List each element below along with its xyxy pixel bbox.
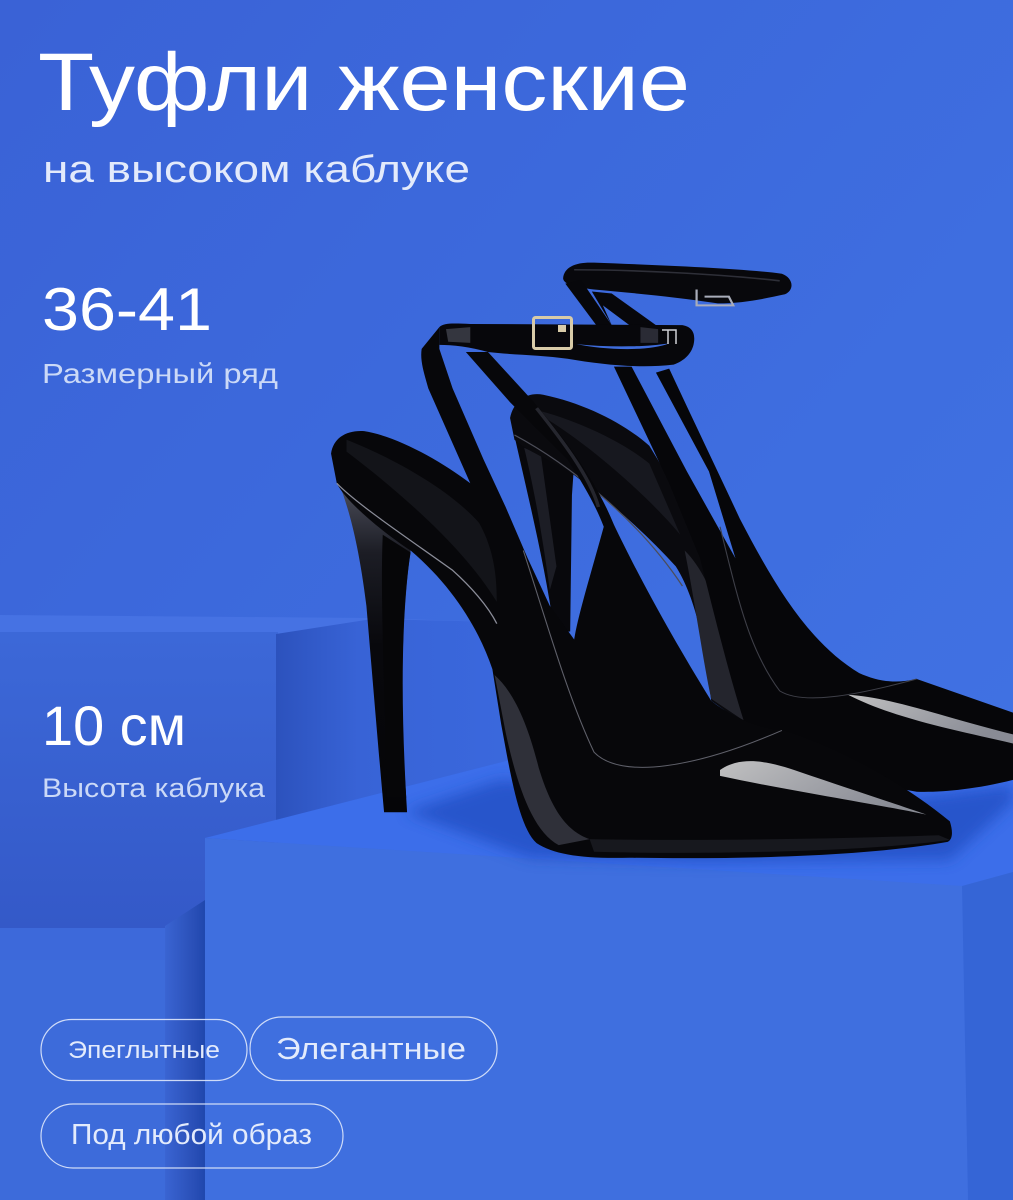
upper strap buckle	[697, 290, 733, 305]
toe highlight	[720, 761, 926, 815]
back straps and vamp	[614, 367, 1013, 792]
front ankle strap	[439, 323, 694, 366]
stat: size range: Размерный ряд	[42, 358, 278, 389]
upper ankle strap	[563, 263, 792, 303]
stat: heel height: Высота каблука	[42, 773, 266, 803]
front stiletto heel	[338, 479, 411, 812]
back shoe	[510, 263, 1013, 792]
back insole	[528, 408, 680, 535]
left block top face	[0, 615, 500, 640]
lower step front face	[0, 960, 205, 1200]
front shoe upper silhouette	[331, 327, 952, 858]
tag: Под любой образ	[41, 1104, 343, 1168]
lower step top face	[0, 928, 205, 965]
strap window	[576, 343, 669, 349]
front block top face	[205, 760, 1013, 886]
back shoe lining sheen	[685, 551, 747, 723]
body left sheen	[495, 675, 590, 845]
left block side face	[276, 619, 510, 840]
shoe shadow	[405, 780, 1013, 862]
tag: Элегантные: Элегантные	[276, 1031, 466, 1066]
front block right face	[962, 872, 1013, 1200]
left block front face	[0, 632, 278, 928]
heel rim line	[337, 483, 497, 624]
stat: heel height: 10 см	[42, 694, 186, 757]
front block front face	[205, 838, 968, 1200]
strap keeper	[662, 330, 676, 344]
sole sheen	[590, 835, 950, 853]
topline seam	[523, 551, 782, 767]
back shoe heel	[514, 436, 574, 632]
tag: Элегантные	[250, 1017, 497, 1080]
title: Туфли женские	[38, 37, 690, 128]
back toe highlight	[848, 695, 1013, 743]
tag: Эпеглытные	[41, 1020, 247, 1080]
front insole	[347, 440, 497, 602]
stat: heel height	[42, 694, 266, 803]
stat: size range: 36-41	[42, 276, 212, 343]
back shoe cup	[510, 394, 744, 724]
subtitle: на высоком каблуке	[43, 149, 470, 191]
tag: Эпеглытные: Эпеглытные	[68, 1037, 220, 1064]
strap texture highlight	[537, 408, 598, 507]
stat: size range	[42, 276, 278, 389]
block cast shadow	[165, 900, 205, 1200]
tag: Под любой образ: Под любой образ	[71, 1119, 312, 1151]
front shoe	[331, 323, 952, 858]
gold buckle	[534, 318, 572, 348]
back strap links	[565, 280, 612, 325]
